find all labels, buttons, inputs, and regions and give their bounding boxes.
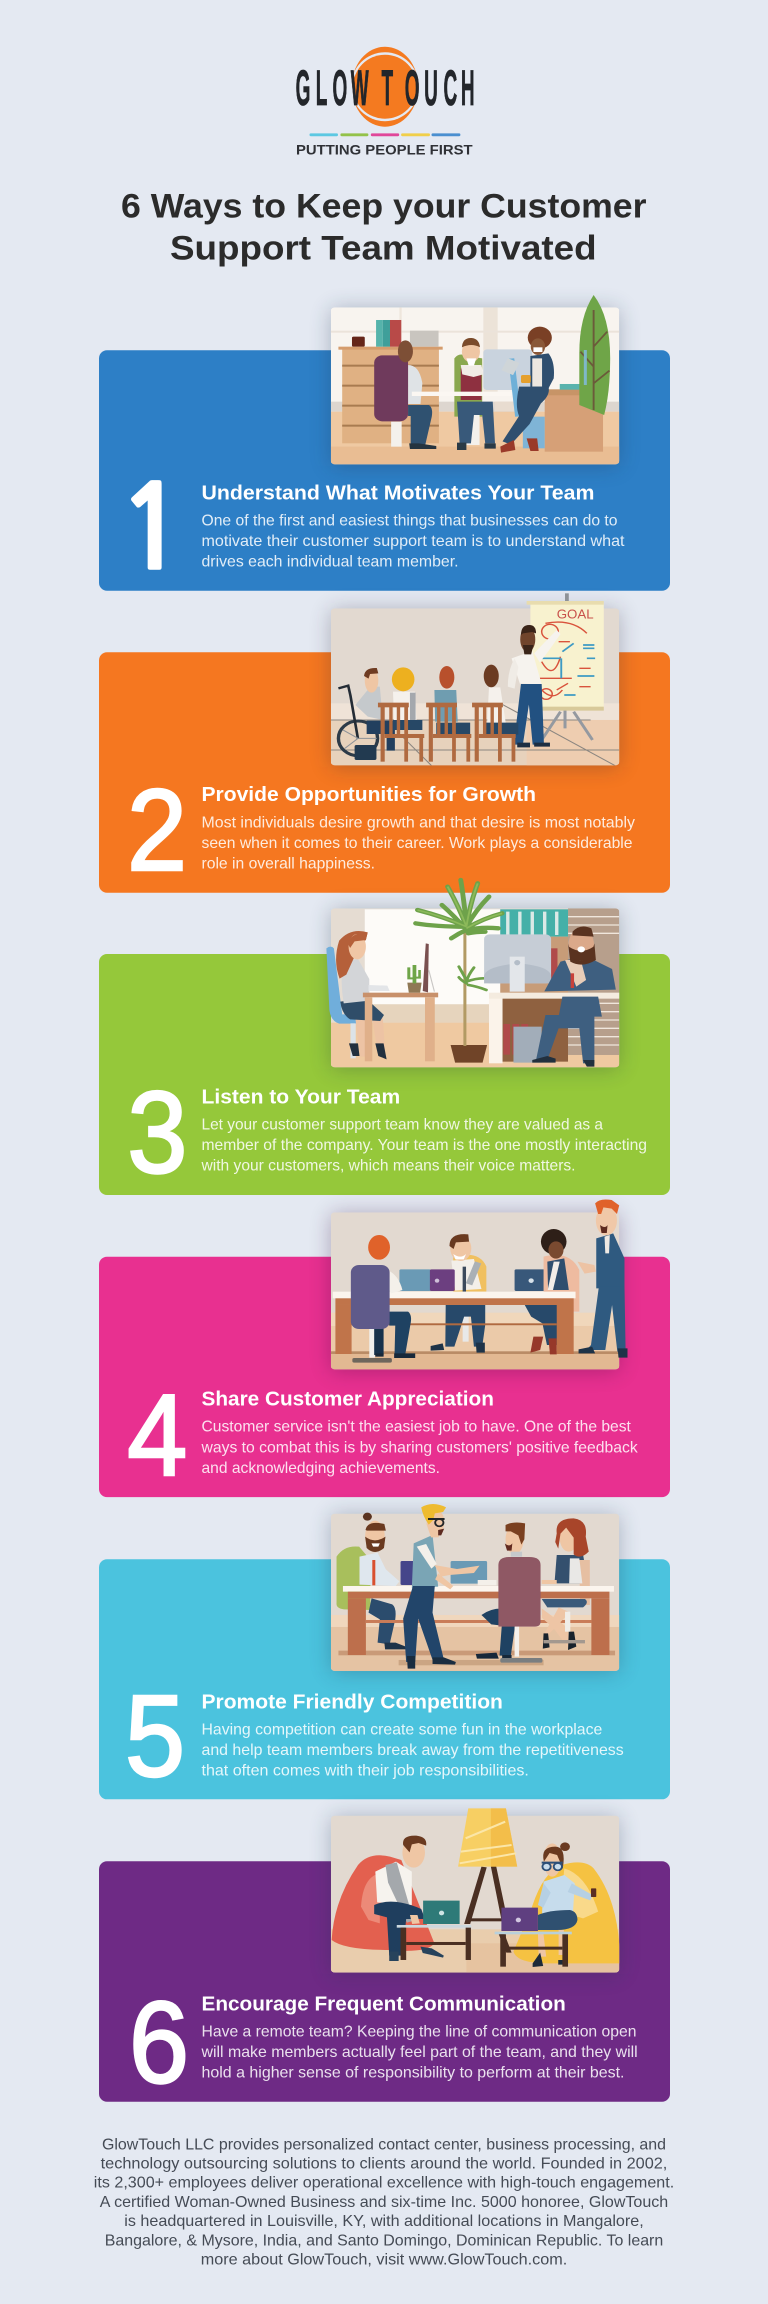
title: Support Team Motivated bbox=[170, 229, 597, 267]
footer: company description: Bangalore, & Mysore, India, and Santo Domingo, Dominican Republic. To learn bbox=[105, 2232, 663, 2249]
panel 5 background bbox=[99, 1559, 670, 1799]
panel 1 heading: Understand What Motivates Your Team bbox=[202, 482, 594, 504]
footer: company description: technology outsourcing solutions to clients around the world. Founded in 2002, bbox=[101, 2156, 667, 2173]
panel 2 body text: role in overall happiness. bbox=[202, 856, 375, 873]
panel 6: encourage frequent communication bbox=[99, 1808, 670, 2108]
panel 6 body text: Have a remote team? Keeping the line of communication open bbox=[202, 2023, 636, 2040]
panel 2 body text: Most individuals desire growth and that desire is most notably bbox=[202, 814, 635, 831]
image shadow bbox=[331, 910, 619, 1069]
panel 1: understand what motivates your team bbox=[99, 295, 670, 591]
logo colour bars bbox=[310, 133, 460, 136]
panel 5 body text: and help team members break away from the repetitiveness bbox=[202, 1742, 624, 1759]
panel 6 body text: will make members actually feel part of the team, and they will bbox=[201, 2044, 638, 2061]
illustration: office with plant and two desks bbox=[326, 880, 619, 1067]
tagline: PUTTING PEOPLE FIRST bbox=[296, 141, 473, 157]
illustration: two people on beanbags with laptops bbox=[331, 1808, 620, 1973]
number 2: 2 bbox=[127, 765, 187, 895]
footer: company description: GlowTouch LLC provides personalized contact center, business processing, and bbox=[102, 2136, 666, 2153]
panel 6 heading: Encourage Frequent Communication bbox=[202, 1993, 566, 2015]
image shadow bbox=[331, 610, 619, 767]
panel 4 body text: Customer service isn't the easiest job to have. One of the best bbox=[202, 1419, 631, 1436]
panel 4 body text bbox=[201, 1419, 639, 1477]
illustration: colleagues talking at a table bbox=[331, 1504, 619, 1671]
panel 4 background bbox=[99, 1257, 670, 1497]
panel 3 background bbox=[99, 954, 670, 1195]
number 4: 4 bbox=[127, 1370, 187, 1500]
panel 3 body text bbox=[201, 1116, 647, 1175]
number 1: 1 bbox=[117, 472, 187, 586]
panel 2 background bbox=[99, 652, 670, 893]
logo wordmark: GLOWTOUCH bbox=[296, 62, 475, 117]
number 5: 5 bbox=[125, 1671, 185, 1801]
image shadow bbox=[331, 309, 619, 466]
panel 6 body text bbox=[201, 2023, 638, 2082]
footer: company description bbox=[94, 2136, 674, 2268]
panel 5: promote friendly competition bbox=[99, 1504, 670, 1801]
panel 4: share customer appreciation bbox=[99, 1199, 670, 1500]
panel 3 body text: Let your customer support team know they are valued as a bbox=[202, 1116, 603, 1133]
panel 2 heading: Provide Opportunities for Growth bbox=[202, 784, 536, 806]
logo: GlowTouch bbox=[296, 47, 475, 157]
image shadow bbox=[331, 1214, 619, 1371]
panel 2 body text bbox=[202, 814, 635, 873]
panel 5 body text bbox=[202, 1721, 624, 1780]
illustration: presenter at flip chart bbox=[331, 593, 619, 767]
panel 3 heading: Listen to Your Team bbox=[202, 1086, 400, 1108]
panel 6 background bbox=[99, 1861, 670, 2102]
panel 1 body text: One of the first and easiest things that businesses can do to bbox=[202, 512, 618, 529]
panel 3 body text: with your customers, which means their voice matters. bbox=[201, 1158, 576, 1175]
flip chart label: GOAL bbox=[557, 607, 594, 622]
panel 3 body text: member of the company. Your team is the one mostly interacting bbox=[202, 1137, 647, 1154]
panel 5 heading: Promote Friendly Competition bbox=[202, 1691, 503, 1713]
panel 1 body text: drives each individual team member. bbox=[202, 554, 458, 571]
panel 1 background bbox=[99, 350, 670, 591]
illustration: team at a long table bbox=[331, 1199, 627, 1369]
panel 4 body text: and acknowledging achievements. bbox=[202, 1460, 440, 1477]
logo emblem: orange circle bbox=[351, 47, 419, 127]
panel 2: provide opportunities for growth bbox=[99, 593, 670, 895]
number 3: 3 bbox=[127, 1068, 187, 1198]
image shadow bbox=[331, 1817, 619, 1974]
panel 5 body text: that often comes with their job responsibilities. bbox=[202, 1763, 529, 1780]
footer: company description: A certified Woman-Owned Business and six-time Inc. 5000 honoree, GlowTouch bbox=[100, 2194, 668, 2211]
panel 4 heading: Share Customer Appreciation bbox=[202, 1389, 494, 1411]
infographic canvas bbox=[94, 46, 673, 2266]
image shadow bbox=[331, 1515, 619, 1672]
panel 4 body text: ways to combat this is by sharing customers' positive feedback bbox=[201, 1439, 639, 1456]
number 6: 6 bbox=[129, 1978, 189, 2108]
footer: company description: more about GlowTouch, visit www.GlowTouch.com. bbox=[201, 2251, 567, 2268]
panel 3: listen to your team bbox=[99, 880, 670, 1198]
footer: company description: is headquartered in Louisville, KY, with additional locations in Mangalore, bbox=[124, 2213, 644, 2230]
panel 1 body text: motivate their customer support team is to understand what bbox=[202, 533, 625, 550]
illustration: office meeting at a desk bbox=[331, 295, 619, 464]
panel 6 body text: hold a higher sense of responsibility to perform at their best. bbox=[202, 2065, 624, 2082]
title: 6 Ways to Keep your Customer bbox=[121, 187, 646, 225]
footer: company description: its 2,300+ employees deliver operational excellence with high-touch engagement. bbox=[94, 2175, 674, 2192]
panel 5 body text: Having competition can create some fun in the workplace bbox=[202, 1721, 602, 1738]
panel 1 body text bbox=[202, 512, 625, 571]
title bbox=[121, 187, 646, 267]
panel 2 body text: seen when it comes to their career. Work plays a considerable bbox=[202, 835, 633, 852]
